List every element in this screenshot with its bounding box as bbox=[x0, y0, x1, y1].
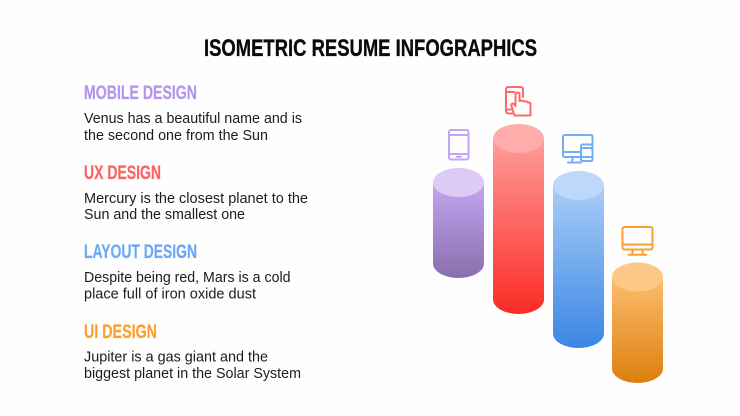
heading: mobile design: MOBILE DESIGN bbox=[84, 83, 197, 104]
title: ISOMETRIC RESUME INFOGRAPHICS bbox=[204, 35, 537, 62]
cylinder: blue bbox=[553, 171, 604, 348]
description: layout design: Despite being red, Mars is a cold bbox=[84, 269, 290, 286]
description: ux design: Sun and the smallest one bbox=[84, 206, 245, 223]
text block: layout design bbox=[84, 242, 290, 302]
description: ux design: Mercury is the closest planet to the bbox=[84, 190, 308, 207]
icon: smartphone bbox=[449, 130, 468, 160]
cylinder: red bbox=[493, 124, 544, 314]
description: ui design: biggest planet in the Solar System bbox=[84, 365, 301, 382]
description: ui design: Jupiter is a gas giant and the bbox=[84, 348, 268, 366]
description: layout design bbox=[84, 269, 290, 302]
text block: mobile design bbox=[84, 83, 302, 144]
text block: ux design bbox=[84, 163, 308, 223]
description: ux design bbox=[84, 190, 308, 223]
icon: monitor and phone bbox=[563, 135, 592, 162]
icon: touch phone bbox=[506, 87, 531, 116]
heading: layout design: LAYOUT DESIGN bbox=[84, 242, 197, 263]
cylinder: orange bbox=[612, 262, 663, 383]
text block: ui design bbox=[84, 322, 301, 382]
heading: ux design: UX DESIGN bbox=[84, 163, 161, 184]
description: layout design: place full of iron oxide dust bbox=[84, 286, 257, 302]
description: ui design bbox=[84, 348, 301, 382]
cylinder: purple bbox=[433, 168, 484, 278]
icon: monitor bbox=[622, 227, 652, 255]
description: mobile design: the second one from the Sun bbox=[84, 127, 268, 144]
heading: ui design: UI DESIGN bbox=[84, 322, 157, 343]
description: mobile design: Venus has a beautiful name and is bbox=[84, 110, 302, 127]
description: mobile design bbox=[84, 110, 302, 144]
